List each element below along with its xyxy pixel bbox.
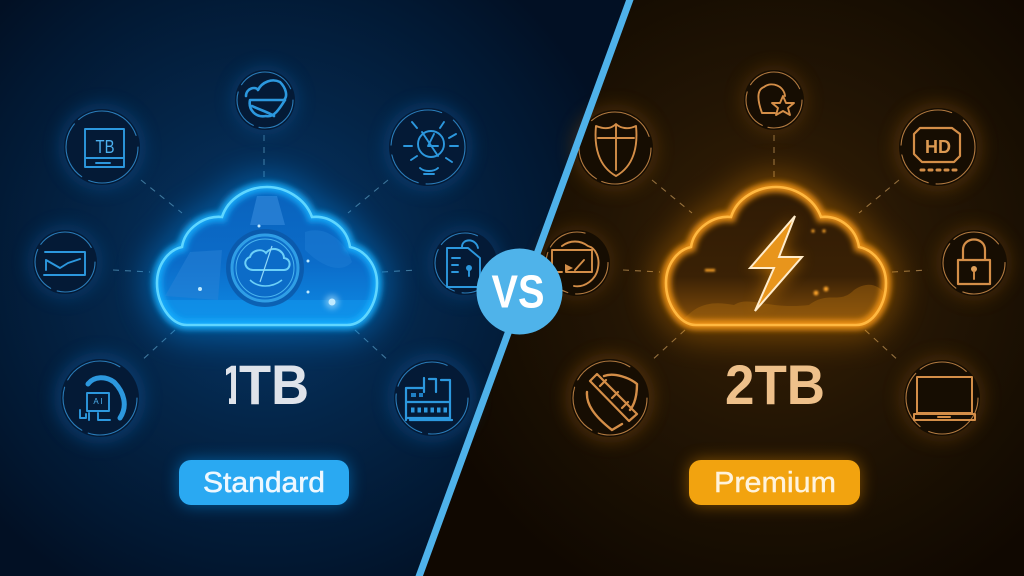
lightning bolt [750,216,802,311]
sparkles [705,229,828,295]
cloud badge [226,229,304,307]
connector lines: standard [113,135,417,362]
icon: server chart [387,353,477,443]
icon: padlock [936,225,1012,301]
icon: HD screen: HD [925,137,951,157]
capacity: 1TB: 1 [218,353,249,416]
icon: laptop mail [27,224,103,300]
divider [418,0,630,576]
connector lines: premium [623,135,928,362]
capacity: 1TB: TB [239,353,309,416]
capacity: 2TB: 2TB [725,353,825,416]
icon: battery badge [539,225,615,301]
VS badge [476,248,562,334]
panel: premium background [419,0,1024,576]
standard cloud [155,187,380,328]
icon: heart star [739,65,809,135]
icon: wrench and shield [565,353,655,443]
icon: hand and cloud [230,65,300,135]
icon: laptop [898,354,986,442]
badge: standard [179,460,349,505]
icon: TB drive: TB [96,137,114,157]
sparkles [198,224,339,309]
panel: standard background [0,0,630,576]
icon: shield [571,104,659,192]
icon: HD screen [893,102,983,192]
icon: light bulb [383,102,473,192]
icon: document lock [427,225,503,301]
icon: AI robot [54,352,146,444]
capacity: 1TB [226,366,307,404]
icon: TB drive [58,103,146,191]
badge: premium [689,460,860,505]
VS badge: VS [492,266,544,318]
badge: premium: Premium [714,467,836,499]
icon: AI robot: A I [93,397,103,406]
badge: standard: Standard [203,467,325,499]
premium cloud [666,187,889,330]
